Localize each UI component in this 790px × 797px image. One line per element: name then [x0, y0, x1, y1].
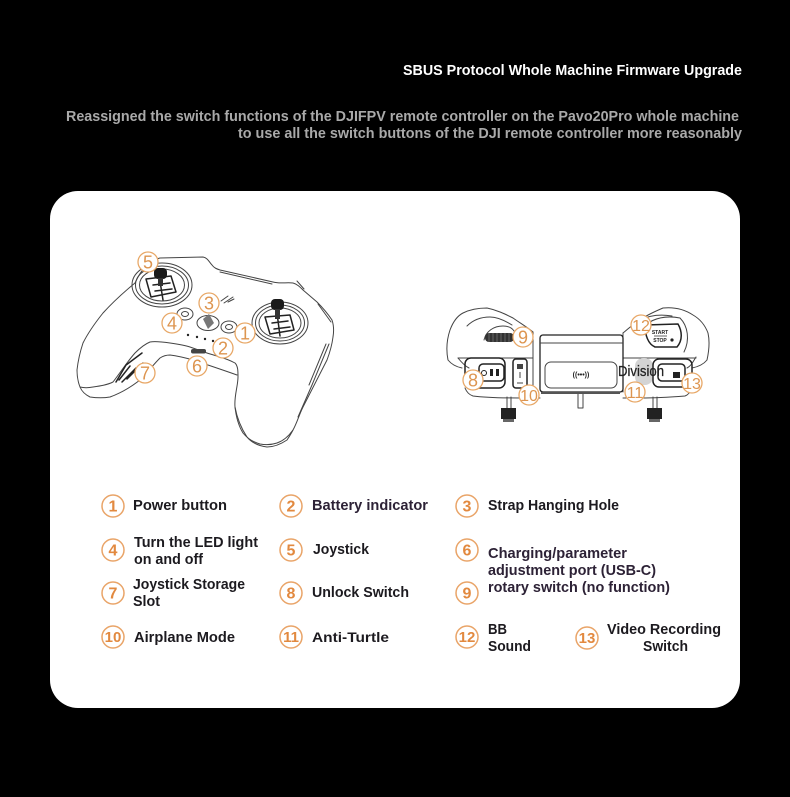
marker 7 — [135, 363, 155, 384]
centre buttons and switch — [177, 296, 237, 333]
marker 12: 12 — [632, 318, 650, 335]
marker 6 — [187, 356, 207, 376]
legend 10: Airplane Mode — [134, 629, 235, 646]
legend 9: rotary switch (no function) — [488, 579, 670, 596]
USB-C port — [191, 349, 206, 354]
marker 10: 10 — [520, 388, 538, 405]
marker 1: 1 — [240, 324, 250, 344]
legend 4 — [102, 534, 258, 568]
video recording button — [653, 359, 692, 387]
right stick — [647, 397, 662, 422]
top shoulder strip — [220, 272, 331, 322]
marker 9: 9 — [518, 328, 528, 348]
marker 3: 3 — [204, 294, 214, 314]
legend 12: BB — [488, 621, 507, 638]
marker 9 — [513, 327, 533, 348]
legend 7: Slot — [133, 593, 160, 610]
marker 13: 13 — [683, 376, 701, 393]
subtitle: to use all the switch buttons of the DJI remote controller more reasonably — [238, 125, 743, 142]
legend 8 — [280, 582, 409, 604]
rotary wheel — [484, 326, 514, 342]
centre block with wireless panel — [540, 335, 623, 408]
marker 4: 4 — [167, 314, 177, 334]
legend 9 — [456, 579, 670, 604]
legend 12: Sound — [488, 638, 531, 655]
left joystick — [132, 263, 192, 307]
legend 12 — [456, 621, 531, 655]
subtitle: Reassigned the switch functions of the DJIFPV remote controller on the Pavo20Pro whole machine — [66, 108, 739, 125]
marker 3 — [199, 293, 219, 314]
legend 13: Switch — [643, 638, 688, 655]
centre block with wireless panel: ((•••)) — [573, 372, 589, 379]
Division overlay text: Division — [618, 363, 664, 380]
legend 6 — [456, 539, 656, 579]
legend 9: 9 — [463, 586, 472, 602]
legend 7: 7 — [109, 586, 118, 602]
legend 7 — [102, 576, 245, 610]
diagram markers — [135, 252, 702, 405]
legend 10: 10 — [105, 629, 121, 646]
controller front view — [77, 257, 334, 447]
marker 5 — [138, 252, 158, 272]
left grip — [447, 308, 533, 368]
legend 2: 2 — [287, 498, 296, 516]
legend 3: 3 — [463, 498, 472, 516]
start stop button: STOP — [653, 338, 667, 344]
body shoulder lines — [458, 332, 696, 398]
legend 4: 4 — [109, 542, 118, 560]
marker 4 — [162, 313, 182, 334]
joystick storage slot — [116, 353, 143, 382]
subtitle — [66, 108, 743, 142]
airplane mode switch — [513, 359, 527, 388]
panel: white card — [50, 191, 740, 708]
legend 1 — [102, 495, 227, 517]
legend 12: 12 — [459, 629, 475, 646]
legend — [102, 495, 721, 655]
legend 5 — [280, 539, 370, 561]
legend 6: 6 — [463, 542, 472, 560]
left stick — [501, 397, 516, 422]
right grip edge — [298, 344, 329, 417]
marker 1 — [235, 323, 255, 344]
legend 2 — [280, 495, 428, 517]
legend 8: 8 — [287, 586, 296, 602]
start stop button — [637, 317, 687, 352]
anti-turtle switch blur patch — [635, 358, 653, 385]
legend 1: 1 — [109, 498, 118, 516]
marker 6: 6 — [192, 356, 202, 376]
marker 5: 5 — [143, 252, 153, 272]
legend 6: Charging/parameter — [488, 545, 627, 562]
legend 2: Battery indicator — [312, 497, 428, 514]
marker 7: 7 — [140, 364, 150, 384]
marker 2 — [213, 338, 233, 358]
legend 3: Strap Hanging Hole — [488, 497, 619, 514]
right grip — [623, 308, 709, 368]
controller rear view — [447, 308, 709, 422]
right joystick — [252, 299, 308, 344]
title: SBUS Protocol Whole Machine Firmware Upgrade — [403, 62, 742, 79]
legend 5: 5 — [287, 542, 296, 560]
legend 3 — [456, 495, 619, 517]
legend 5: Joystick — [313, 541, 370, 558]
legend 7: Joystick Storage — [133, 576, 245, 593]
legend 4: Turn the LED light — [134, 534, 258, 551]
controller lower shell — [80, 355, 293, 447]
battery indicator dots — [187, 334, 214, 342]
marker 11: 11 — [627, 385, 643, 402]
legend 13: 13 — [579, 630, 595, 647]
legend 11 — [280, 626, 389, 648]
legend 8: Unlock Switch — [312, 584, 409, 601]
legend 10 — [102, 626, 235, 648]
legend 6: adjustment port (USB-C) — [488, 562, 656, 579]
marker 8 — [463, 370, 483, 390]
legend 13: Video Recording — [607, 621, 721, 638]
legend 11: 11 — [283, 629, 299, 646]
marker 2: 2 — [218, 338, 228, 358]
unlock switch button — [465, 358, 505, 388]
legend 4: on and off — [134, 551, 204, 568]
legend 13 — [576, 621, 721, 655]
controller body outline — [77, 257, 334, 445]
marker 8: 8 — [468, 370, 478, 390]
start stop button: START — [652, 330, 668, 336]
legend 11: Anti-Turtle — [312, 629, 389, 645]
legend 1: Power button — [133, 497, 227, 514]
